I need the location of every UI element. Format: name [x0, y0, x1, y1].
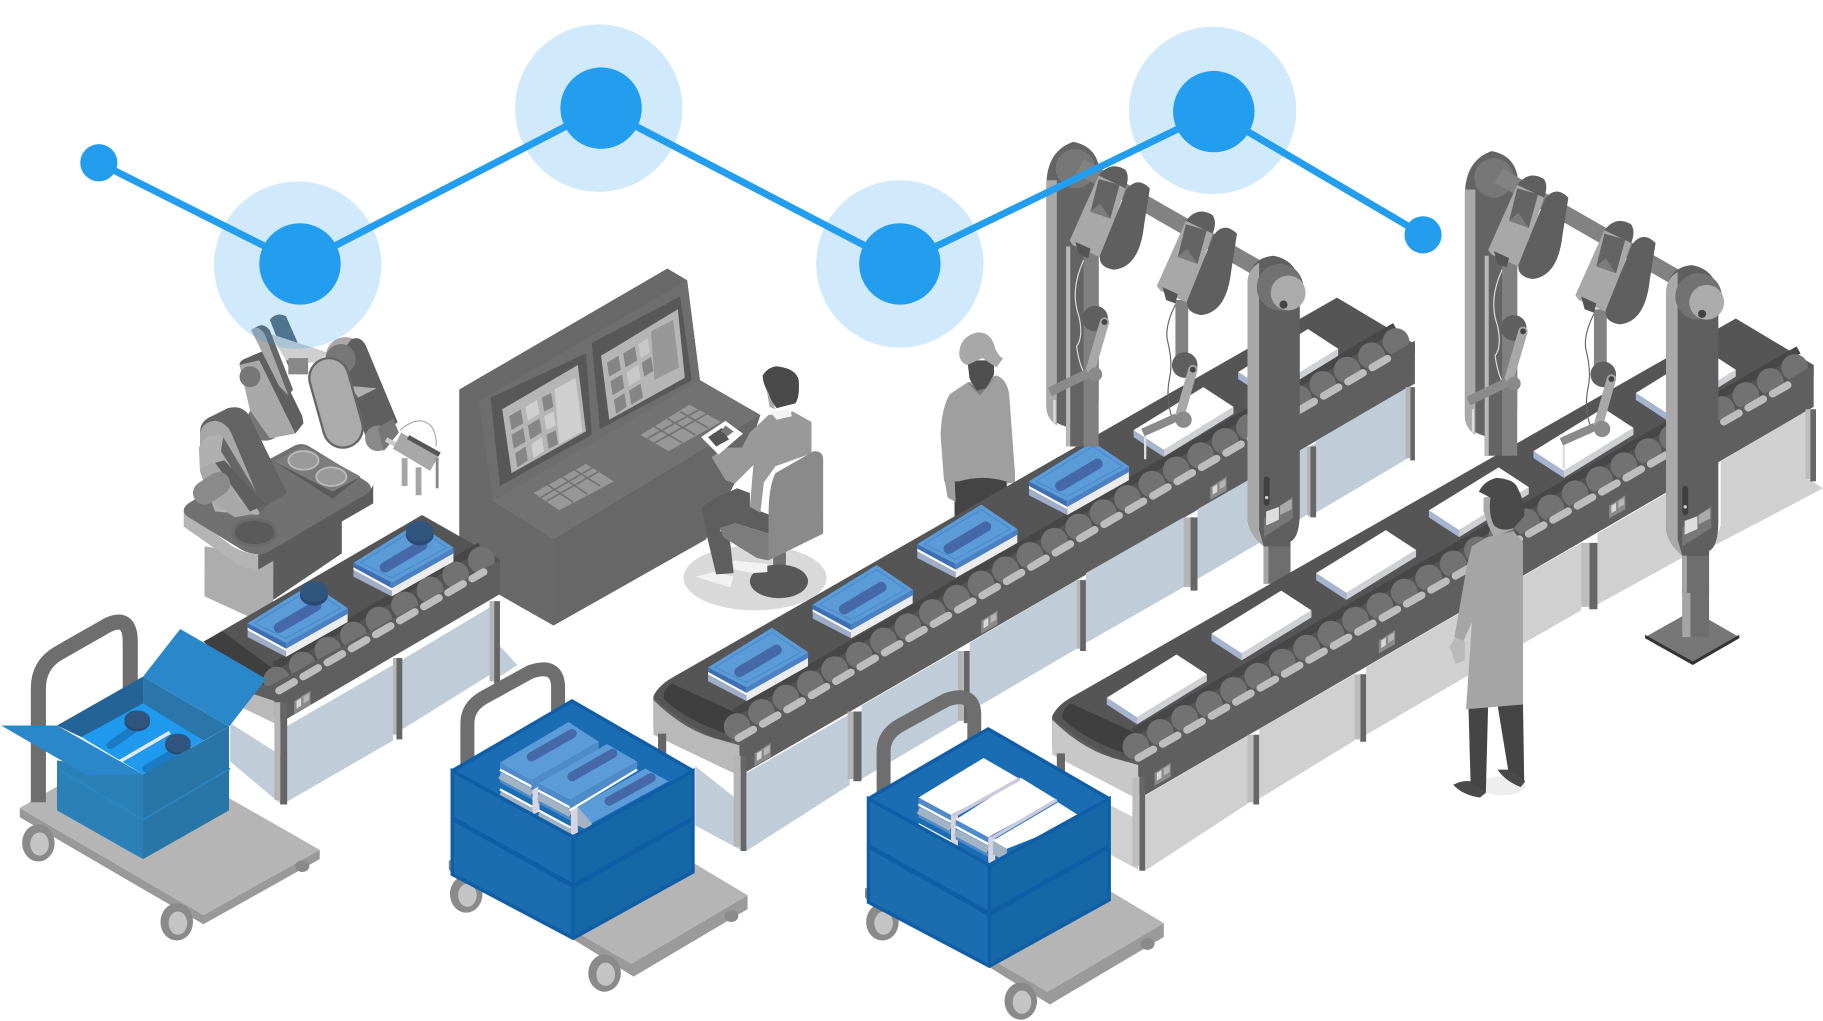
product: blue tray	[917, 505, 1017, 578]
product: blue item with knob	[248, 584, 348, 657]
roller pills	[1138, 380, 1796, 758]
product: white panel	[1636, 350, 1736, 420]
side strip	[1052, 365, 1814, 796]
belt surface	[653, 298, 1415, 753]
legs	[280, 601, 500, 805]
face	[765, 381, 775, 409]
floor shadows: conveyor B	[695, 421, 1410, 850]
panels	[746, 387, 1408, 851]
hard hat	[959, 332, 1003, 367]
shoulder	[200, 407, 287, 508]
items in box	[81, 703, 203, 774]
back gear and link	[270, 315, 308, 366]
keypad 1	[534, 464, 614, 510]
conveyor C	[1052, 319, 1816, 871]
chair stem	[773, 552, 786, 575]
halo nodes	[214, 24, 1296, 349]
trolley with blue crate and blue products	[449, 669, 748, 992]
conveyor B	[653, 298, 1415, 851]
box left face	[57, 760, 143, 859]
short rear leg	[1057, 753, 1065, 774]
pedestal	[205, 512, 342, 628]
recess	[1134, 350, 1799, 732]
product: white panel	[1429, 467, 1529, 537]
network line chart	[80, 24, 1442, 349]
worker face	[967, 360, 994, 391]
elbow joint	[246, 403, 284, 441]
panels	[286, 607, 491, 802]
end cap	[653, 700, 739, 773]
handle	[38, 622, 130, 802]
stack 1	[918, 758, 1020, 850]
product: white panel	[1134, 387, 1234, 457]
rollers	[1136, 364, 1801, 746]
stack 2	[538, 744, 637, 836]
side strip	[233, 560, 500, 722]
base link	[200, 464, 253, 517]
knob	[406, 521, 434, 545]
product: white panel	[1211, 591, 1311, 660]
product: white panel	[1107, 655, 1207, 724]
shoe	[1453, 781, 1486, 798]
operator legs	[702, 488, 770, 574]
control plates	[1154, 495, 1625, 786]
legs light	[1132, 409, 1810, 866]
control plates	[755, 477, 1227, 766]
conveyor A	[203, 515, 500, 805]
hand	[1450, 637, 1465, 664]
control console	[459, 269, 760, 625]
crate front	[452, 771, 693, 938]
rollers	[277, 559, 482, 680]
stack 3	[578, 768, 669, 832]
tablet	[701, 421, 743, 455]
control plate	[294, 691, 310, 714]
gantry robot 2	[1465, 151, 1724, 593]
operator on chair	[683, 366, 827, 610]
gantry robot 1	[1046, 142, 1306, 584]
legs dark	[1139, 409, 1816, 871]
hair	[1479, 478, 1524, 530]
floor disc	[683, 545, 827, 610]
gripper	[386, 439, 403, 449]
chair seat	[720, 523, 768, 560]
trolley with blue crate and white products	[865, 697, 1164, 1020]
product: blue tray	[813, 565, 913, 638]
woman in lab coat	[1450, 478, 1525, 798]
floor shadows: conveyor C	[1104, 444, 1823, 870]
knob	[300, 581, 328, 606]
left flap	[1, 725, 143, 775]
box walls	[57, 677, 143, 737]
box right face	[143, 727, 229, 859]
legs dark	[741, 387, 1415, 851]
worker jacket	[941, 376, 1015, 481]
keypad 2	[641, 405, 721, 451]
short rear leg	[658, 734, 666, 755]
pedestal table	[184, 444, 373, 570]
front shoe	[695, 572, 734, 587]
crate front	[868, 799, 1109, 966]
recess	[735, 327, 1395, 713]
product: blue item with knob	[353, 523, 453, 596]
stack 2	[956, 778, 1057, 872]
product: blue tray	[708, 628, 808, 701]
trolley with open blue box	[1, 622, 320, 941]
legs	[1468, 705, 1524, 793]
chair back	[768, 451, 823, 560]
solid nodes	[80, 67, 1442, 305]
belt surface	[1052, 319, 1814, 773]
shoe	[1497, 770, 1525, 787]
connecting line	[99, 108, 1423, 264]
panels	[1145, 409, 1809, 871]
floor shadows: conveyor A	[230, 634, 517, 805]
chair base	[750, 564, 808, 598]
platform	[20, 786, 320, 915]
wrist	[365, 426, 391, 451]
box wall right	[143, 677, 229, 741]
product: blue tray	[1029, 442, 1129, 515]
collar	[770, 409, 792, 420]
gantry robot 2 base plate	[1645, 587, 1739, 665]
robot arm	[199, 315, 439, 517]
robot arm station	[184, 315, 439, 628]
face and neck	[1484, 495, 1514, 537]
torso	[712, 412, 812, 513]
floor shadow	[1479, 777, 1525, 795]
product: white panel	[1533, 408, 1633, 478]
screen 2	[592, 296, 692, 429]
product: white panel	[1316, 530, 1416, 600]
end cap	[236, 688, 281, 727]
hands	[944, 471, 1015, 502]
product: white panel	[1238, 329, 1338, 399]
hair	[763, 366, 799, 408]
console body	[459, 269, 760, 625]
belt dark end	[1063, 703, 1142, 755]
wheels	[22, 824, 309, 941]
legs light	[734, 387, 1410, 846]
belt dark end	[664, 684, 743, 735]
stack 3	[953, 779, 1084, 861]
screen 1	[491, 353, 592, 486]
recess	[274, 546, 480, 666]
end cap	[1052, 720, 1138, 796]
right upper arm	[326, 337, 365, 377]
worker legs	[955, 471, 1007, 517]
roller pills	[738, 353, 1396, 738]
platform edge	[20, 808, 320, 924]
belt surface	[203, 515, 500, 698]
worker with hard hat	[941, 332, 1015, 517]
seam	[57, 768, 230, 820]
side strip	[653, 341, 1415, 773]
rear shoe	[731, 560, 767, 573]
worker collar	[967, 376, 996, 395]
rollers	[737, 341, 1397, 727]
roller pills	[279, 572, 484, 691]
right flap	[143, 629, 266, 727]
stack 1	[500, 722, 599, 815]
lab coat	[1454, 531, 1523, 709]
middle link	[240, 360, 295, 438]
